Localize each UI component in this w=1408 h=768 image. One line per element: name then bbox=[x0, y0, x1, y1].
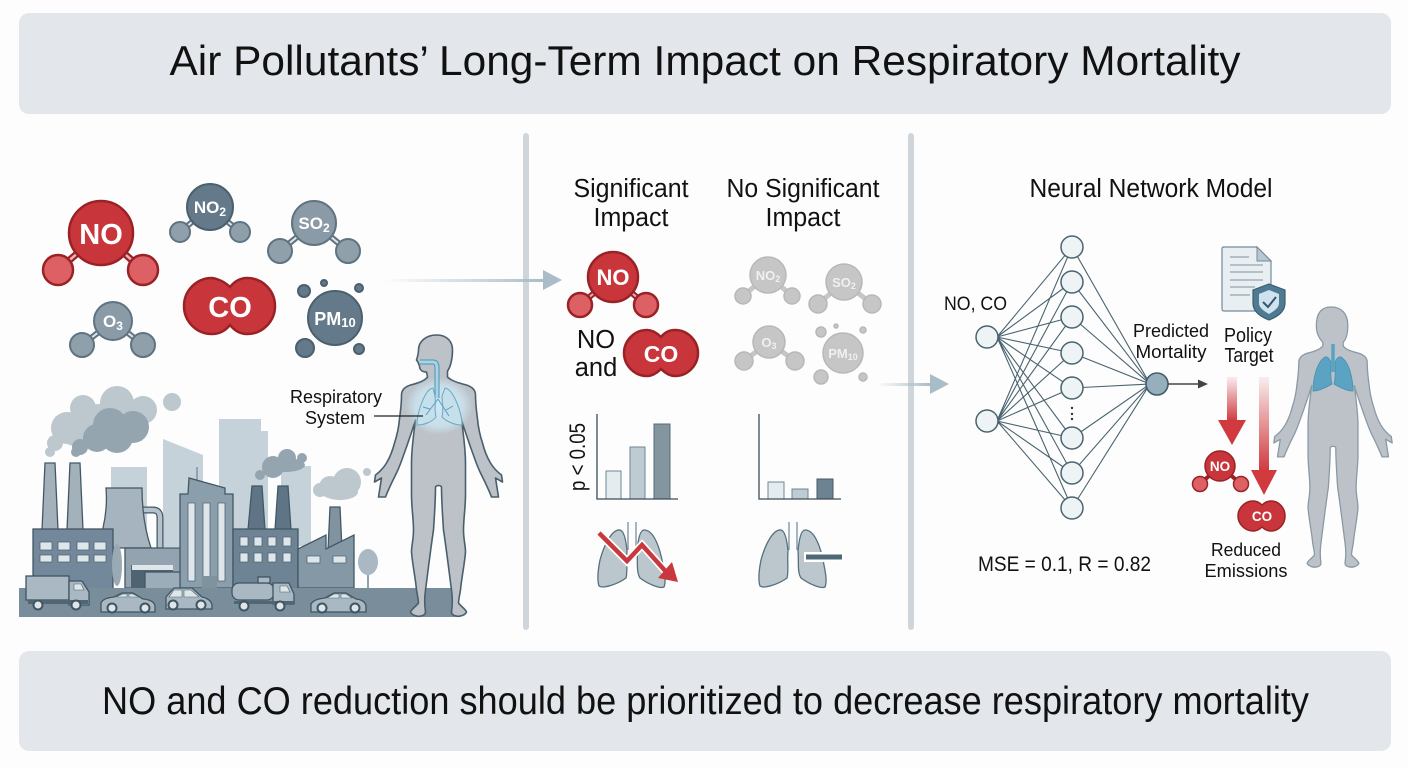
molecule: NO2 bbox=[170, 184, 250, 242]
icon: policy document with shield bbox=[1222, 247, 1285, 320]
heading: no significant impact bbox=[726, 175, 880, 232]
molecule: CO: CO bbox=[208, 292, 252, 324]
ground bbox=[19, 588, 457, 617]
dash: no change bbox=[804, 552, 843, 562]
label: policy target: Policy bbox=[1224, 325, 1272, 347]
faded molecules: non significant pollutants: O bbox=[761, 335, 772, 350]
label: policy target bbox=[1224, 325, 1274, 367]
label: reduced emissions: Reduced bbox=[1211, 540, 1281, 560]
molecule: reduced CO bbox=[1238, 501, 1285, 531]
car bbox=[311, 593, 366, 612]
arrow: to significance panel bbox=[385, 270, 562, 290]
faded molecules: non significant pollutants: 10 bbox=[848, 352, 858, 362]
metrics: MSE = 0.1, R = 0.82 bbox=[978, 552, 1151, 576]
arrow: decreasing bbox=[599, 533, 678, 582]
heading: neural network: Neural Network Model bbox=[1030, 175, 1272, 203]
truck bbox=[26, 576, 89, 610]
output node bbox=[1146, 373, 1168, 395]
icon: lungs with no change bbox=[759, 522, 843, 587]
label: reduced emissions bbox=[1204, 540, 1288, 581]
faded molecules: non significant pollutants: 3 bbox=[772, 341, 777, 351]
label: predicted mortality: Predicted bbox=[1133, 321, 1209, 341]
molecule: O3: 3 bbox=[116, 319, 123, 333]
smoke clouds bbox=[45, 386, 371, 500]
background buildings bbox=[111, 419, 311, 547]
label: NO and bbox=[575, 326, 617, 382]
lungs highlighted bbox=[1313, 344, 1353, 391]
molecule: CO significant bbox=[624, 330, 698, 376]
heading: significant impact bbox=[574, 175, 688, 232]
label: respiratory system bbox=[290, 386, 423, 428]
faded molecules: non significant pollutants: 2 bbox=[775, 274, 780, 284]
title: Air Pollutants’ Long-Term Impact on Respiratory Mortality bbox=[170, 37, 1240, 84]
human figure with respiratory system bbox=[290, 335, 502, 616]
tree bbox=[358, 549, 378, 589]
molecule: SO2: 2 bbox=[323, 221, 330, 235]
car bbox=[101, 593, 155, 612]
molecule: NO bbox=[43, 201, 158, 285]
panel dividers bbox=[523, 133, 914, 630]
molecule: reduced NO: NO bbox=[1210, 459, 1230, 474]
molecule: O3: O bbox=[103, 312, 116, 331]
human figure with highlighted lungs bbox=[1274, 307, 1392, 567]
faded molecules: non significant pollutants: PM bbox=[828, 346, 848, 361]
panel: pollutants and sources bbox=[19, 184, 502, 617]
title banner bbox=[19, 13, 1391, 114]
molecule: reduced CO: CO bbox=[1252, 509, 1272, 524]
molecule: CO bbox=[184, 278, 275, 334]
label: predicted mortality bbox=[1133, 321, 1209, 362]
label: NO and: NO bbox=[577, 326, 615, 354]
label: NO and: and bbox=[575, 354, 617, 382]
heading: no significant impact: No Significant bbox=[726, 175, 880, 203]
molecule: CO significant: CO bbox=[644, 341, 678, 367]
bar chart: significant bbox=[565, 414, 678, 499]
faded molecules: non significant pollutants: 2 bbox=[851, 281, 856, 291]
shield bbox=[1253, 284, 1285, 320]
heading: significant impact: Impact bbox=[594, 204, 668, 232]
input nodes bbox=[976, 326, 998, 432]
molecule: reduced NO bbox=[1192, 451, 1248, 492]
label: respiratory system: System bbox=[305, 407, 365, 428]
central low building bbox=[125, 548, 182, 588]
molecule: SO2 bbox=[268, 201, 360, 263]
label: reduced emissions: Emissions bbox=[1204, 561, 1288, 581]
ellipsis dots bbox=[1071, 407, 1073, 420]
arrow: reduce NO bbox=[1218, 377, 1246, 445]
faded molecules: non significant pollutants: NO bbox=[756, 268, 775, 283]
label: predicted mortality: Mortality bbox=[1136, 342, 1206, 362]
lungs and airway bbox=[417, 362, 462, 425]
factory right bbox=[233, 529, 298, 589]
bar chart: not significant bbox=[759, 414, 841, 499]
molecule: NO significant: NO bbox=[596, 265, 630, 290]
heading: no significant impact: Impact bbox=[766, 204, 840, 232]
illustration: industrial city bbox=[19, 386, 457, 617]
tanker truck bbox=[232, 577, 294, 610]
molecule: NO2: NO bbox=[194, 198, 219, 217]
molecule: NO significant bbox=[568, 252, 658, 317]
hidden nodes bbox=[1061, 236, 1083, 519]
molecule: NO: NO bbox=[79, 219, 123, 251]
label: inputs: NO, CO bbox=[944, 293, 1007, 315]
particles: PM10: 10 bbox=[341, 315, 356, 330]
label: policy target: Target bbox=[1224, 345, 1274, 367]
chimneys and cooling tower bbox=[42, 463, 83, 530]
arrow: reduce CO bbox=[1251, 377, 1277, 495]
factory left bbox=[33, 529, 113, 589]
label: respiratory system: Respiratory bbox=[290, 386, 383, 407]
faded molecules: non significant pollutants bbox=[735, 257, 881, 384]
conclusion text: NO and CO reduction should be prioritized to decrease respiratory mortality bbox=[102, 680, 1310, 723]
icon: lungs with falling trend bbox=[598, 522, 678, 587]
heading: significant impact: Significant bbox=[574, 175, 688, 203]
tall building bbox=[196, 467, 198, 480]
panel: significance comparison bbox=[565, 175, 881, 587]
faded molecules: non significant pollutants: SO bbox=[832, 275, 851, 290]
particles: PM10 bbox=[296, 280, 364, 357]
conclusion banner bbox=[19, 651, 1391, 751]
panel: neural network model bbox=[944, 175, 1392, 581]
car bbox=[166, 588, 212, 610]
arrow: to model panel bbox=[877, 374, 949, 394]
particles: PM10: PM bbox=[314, 309, 341, 329]
axis label: p < 0.05 bbox=[565, 423, 590, 491]
molecule: SO2: SO bbox=[298, 214, 323, 233]
molecule: O3 bbox=[70, 302, 155, 357]
molecule: NO2: 2 bbox=[219, 205, 226, 219]
neural network diagram bbox=[976, 236, 1168, 519]
arrow: output bbox=[1168, 380, 1208, 388]
